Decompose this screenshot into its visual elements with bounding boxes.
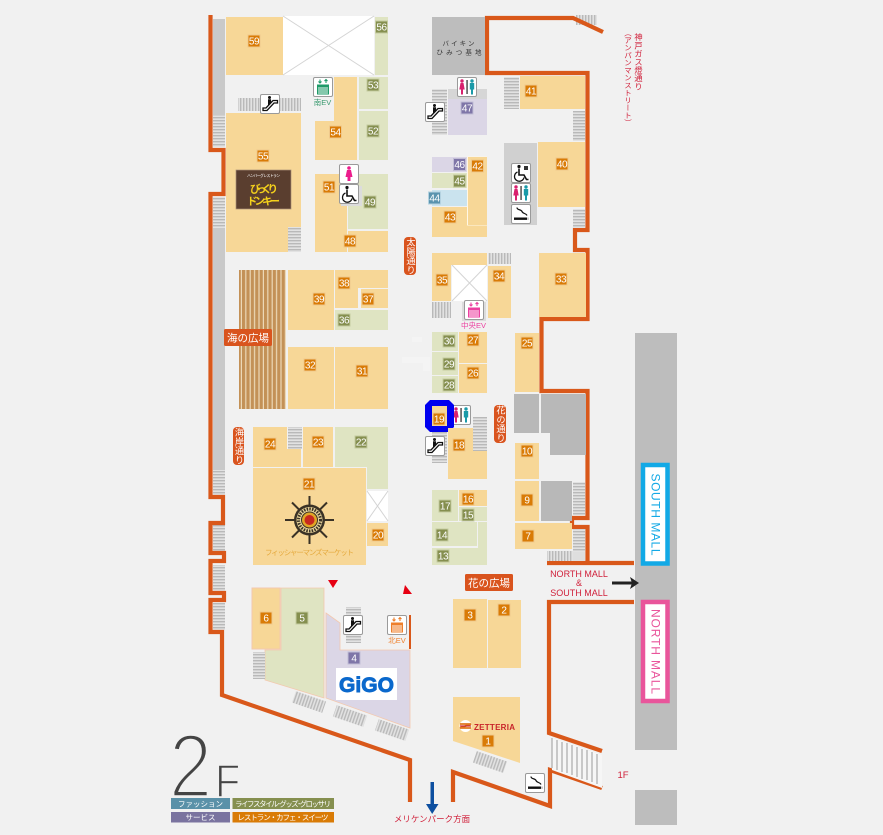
icon: smoking area: [526, 774, 544, 792]
room 52: 52: [368, 126, 379, 138]
room 44: [428, 190, 467, 206]
logo: Bikkuri Donkey: ハンバーグレストラン: [247, 173, 280, 178]
void with cross: [283, 16, 374, 75]
Viking block: ひみつ基地: [436, 48, 482, 56]
room 55: 55: [258, 152, 269, 162]
escalator: central south: [426, 430, 447, 463]
floor number 2F: F: [215, 756, 240, 808]
room 29: 29: [444, 360, 455, 370]
south elevator: [314, 78, 332, 107]
room 36: [335, 310, 388, 330]
room 2: [488, 600, 521, 668]
room 26: 26: [468, 368, 479, 380]
room 59: [226, 17, 283, 75]
label: Hana no Dori: 花の通り: [495, 405, 506, 442]
room 29: [432, 352, 458, 375]
label: Kobe gas-lamp street: （アンパンマンストリート）: [623, 29, 632, 126]
sign: North Mall: [643, 602, 668, 701]
room 2: 2: [501, 606, 507, 616]
room 40: 40: [557, 160, 568, 170]
faint marks: [402, 337, 430, 371]
room 25: 25: [522, 338, 533, 350]
room 31: [335, 347, 388, 409]
sign: South Mall: [643, 465, 668, 564]
room 28: [432, 376, 458, 393]
room 45: [432, 173, 467, 188]
floor number 2F: [169, 716, 240, 816]
arrow: blue to Meriken Park: [426, 782, 438, 814]
room 45: 45: [454, 176, 465, 188]
room 16: 16: [463, 494, 474, 506]
room 53: 53: [368, 80, 379, 92]
logo: Bikkuri Donkey: ドンキー: [247, 194, 280, 208]
room 55: [226, 113, 301, 252]
room 24: [253, 427, 302, 467]
label: Meriken Park direction: メリケンパーク方面: [394, 814, 471, 824]
red triangle markers: [328, 580, 412, 594]
stairs beside room 5: [253, 652, 265, 679]
room 6: 6: [263, 614, 269, 624]
room 22: [335, 427, 388, 489]
room 59: 59: [249, 36, 260, 48]
room 24: 24: [265, 440, 276, 450]
room 1: 1: [485, 736, 491, 748]
label: Taiyo Dori: 太陽通り: [405, 237, 416, 274]
room 39: [288, 270, 334, 330]
room 7: 7: [525, 532, 531, 542]
logo: Zetteria: [460, 720, 515, 732]
diagonal stairs: [292, 691, 507, 773]
room 33: [539, 253, 586, 317]
room 38: 38: [339, 278, 350, 290]
logo: ship's wheel: [285, 496, 334, 544]
room 32: [288, 347, 334, 409]
void with cross: [452, 265, 487, 301]
room 5: 5: [299, 614, 305, 624]
room 37: [361, 289, 388, 308]
room 9: 9: [524, 496, 530, 506]
logo: GiGO: [336, 668, 397, 700]
wood deck: [239, 270, 286, 409]
label: Kaigan Dori: 海岸通り: [234, 427, 244, 464]
escalator: central north: [426, 89, 447, 135]
room 19 highlighted: [425, 400, 454, 432]
room 1: [453, 697, 520, 763]
label: 1F: 1F: [617, 770, 629, 781]
room 54: 54: [330, 128, 341, 138]
room 28: 28: [444, 380, 455, 392]
central elevator: [461, 300, 486, 330]
label: Hana no Hiroba: 花の広場: [468, 576, 510, 590]
room 6: [252, 588, 280, 649]
sign: North Mall: NORTH MALL: [648, 609, 662, 694]
escalator: west upper: [238, 94, 301, 114]
room 39: 39: [314, 294, 325, 306]
room 19 highlighted: 19: [434, 414, 445, 426]
room 47: 47: [462, 104, 473, 114]
room 3: 3: [467, 610, 473, 622]
room 51: 51: [324, 182, 335, 194]
room 23: [303, 427, 333, 467]
room 38: [335, 270, 388, 308]
icon: women's restroom: [340, 164, 358, 184]
room 42: 42: [472, 162, 483, 172]
logo: Zetteria: ZETTERIA: [474, 723, 515, 732]
stairs central: [432, 302, 451, 318]
stairs at top east: [576, 15, 597, 25]
room 34: 34: [494, 272, 505, 282]
room 17: [432, 490, 458, 521]
room 10: [515, 443, 539, 479]
label: Hana no Hiroba: [465, 574, 513, 591]
room 35: 35: [437, 276, 448, 286]
room 48: [344, 231, 388, 252]
stairs near room 9: [573, 482, 585, 515]
gray blocks east: [514, 394, 586, 521]
room 13: 13: [438, 552, 449, 562]
room 17: 17: [440, 502, 451, 512]
room 10: 10: [522, 446, 533, 458]
room 44: 44: [429, 194, 440, 204]
logo: Bikkuri Donkey: [236, 170, 291, 209]
room 32: 32: [305, 360, 316, 372]
room 35: [432, 253, 487, 301]
room 41: 41: [526, 86, 537, 98]
label: Kobe gas-lamp street: 神戸ガス燈通り: [634, 32, 643, 90]
mall corridor: [635, 333, 677, 825]
room 48: 48: [345, 236, 356, 248]
room 21: 21: [304, 480, 315, 490]
room 30: 30: [444, 336, 455, 348]
room 16: [459, 490, 487, 506]
room 14: [432, 522, 477, 546]
label: North Mall & South Mall: SOUTH MALL: [550, 588, 608, 598]
room 40: [538, 142, 585, 207]
room 20: [367, 523, 388, 546]
legend: サービス: [186, 813, 216, 822]
logo: GiGO: GiGO: [339, 674, 394, 697]
legend: [171, 798, 334, 822]
room 43: [432, 207, 487, 237]
room 14: 14: [437, 530, 448, 542]
room 34: [488, 253, 511, 318]
legend: レストラン・カフェ・スイーツ: [238, 813, 328, 822]
room 15: [459, 507, 487, 522]
room 46: [432, 157, 467, 172]
room 25: [515, 333, 539, 392]
room 42: [467, 156, 487, 226]
service block with icons: [504, 143, 537, 225]
arrow: black to mall: [612, 577, 639, 589]
room 36: 36: [339, 316, 350, 326]
room 41: [504, 76, 585, 109]
room 37: 37: [363, 294, 374, 306]
room 46: 46: [454, 160, 465, 171]
room 27: [459, 332, 487, 363]
stairs east: [573, 111, 585, 228]
room 21: フィッシャーマンズマーケット: [265, 547, 354, 557]
room 52: [359, 111, 388, 160]
room 47: [448, 89, 487, 135]
north elevator: 北EV: [388, 636, 406, 645]
room 15: 15: [463, 510, 474, 522]
label: Umi no Hiroba: [224, 329, 272, 346]
icon: restrooms north: [458, 78, 476, 96]
label: North Mall & South Mall: [550, 569, 608, 598]
room 53: [359, 77, 388, 109]
room 22: 22: [356, 438, 367, 448]
room 33: 33: [556, 274, 567, 286]
room 56: 56: [376, 22, 387, 34]
south elevator: 南EV: [314, 97, 331, 107]
sign: South Mall: SOUTH MALL: [648, 474, 662, 556]
central elevator: 中央EV: [461, 320, 486, 330]
west walkway and stairs: [213, 19, 225, 630]
room 56: [375, 17, 388, 75]
room 13: [432, 522, 487, 565]
room 51: [315, 174, 347, 252]
room 5: [265, 588, 324, 698]
room 43: 43: [445, 212, 456, 224]
room 49: [348, 174, 388, 229]
room 26: [459, 364, 487, 393]
legend: ライフスタイル･グッズ･グロッサリ: [235, 798, 331, 808]
room 23: 23: [313, 438, 324, 448]
room 21: [253, 468, 366, 565]
label: North Mall & South Mall: &: [576, 578, 582, 588]
Viking block: [432, 17, 485, 75]
icon: wheelchair: [340, 184, 362, 206]
void with cross: [367, 491, 388, 521]
escalator: north: [344, 607, 362, 643]
room 49: 49: [365, 198, 376, 208]
stairs to 1F: [552, 738, 602, 788]
north elevator: [388, 616, 406, 645]
room 31: 31: [357, 366, 368, 378]
building walls: [210, 15, 634, 806]
room 27: 27: [468, 336, 479, 346]
room 54: [315, 77, 357, 160]
room 4: [326, 613, 410, 728]
room 3: [453, 599, 487, 668]
legend: ファッション: [178, 800, 223, 808]
Viking block: バイキン: [442, 40, 474, 48]
label: Umi no Hiroba: 海の広場: [227, 332, 269, 344]
room 18: [448, 417, 487, 479]
room 4: 4: [351, 654, 357, 664]
logo: Bikkuri Donkey: びっくり: [250, 182, 278, 196]
icon: restrooms central: [452, 406, 470, 424]
room 20: 20: [373, 530, 384, 542]
floor number 2F: 2: [169, 716, 212, 816]
label: North Mall & South Mall: NORTH MALL: [550, 569, 608, 579]
room 9: [515, 481, 539, 521]
room 30: [432, 332, 458, 351]
room 18: 18: [454, 440, 465, 452]
label: Kobe gas-lamp street: [623, 29, 643, 126]
stairs near room 7: [547, 529, 585, 561]
room 7: [515, 523, 572, 549]
